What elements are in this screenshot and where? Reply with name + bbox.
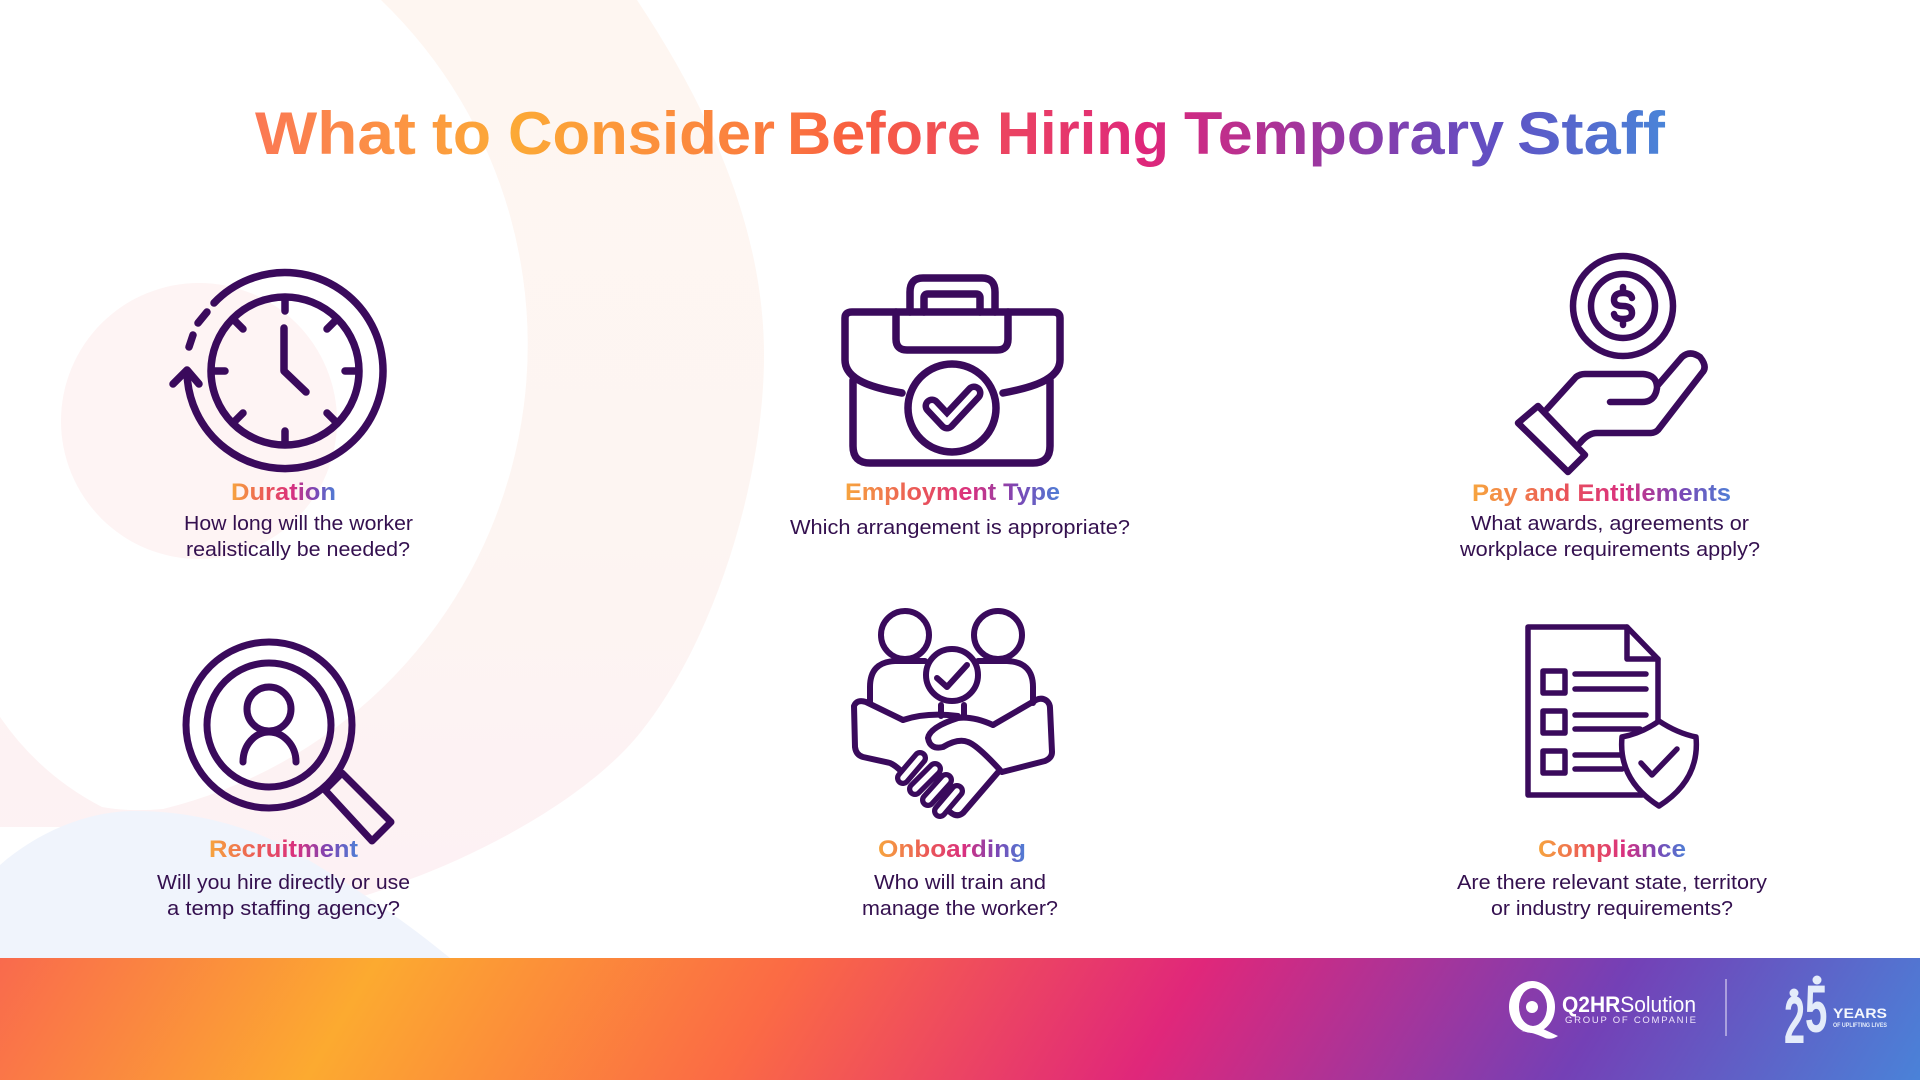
title: [255, 100, 1666, 167]
text: Duration question: How long will the worker: [184, 513, 413, 535]
title: Staff: [1517, 100, 1666, 167]
logo: 25 years: 2: [1784, 984, 1805, 1058]
block: Employment Type: [790, 479, 1130, 539]
divider: [1726, 979, 1727, 1036]
logo: 25 years: [1784, 972, 1888, 1058]
title: to: [432, 100, 491, 167]
heading: Employment Type: Employment Type: [845, 479, 1060, 506]
title: Temporary: [1184, 100, 1505, 167]
title: Hiring: [997, 100, 1169, 167]
background decorative shapes: [0, 0, 764, 958]
icon: magnifier with person: [186, 642, 391, 841]
text: Recruitment question: [157, 872, 410, 920]
logo: 25 years: 5: [1805, 972, 1827, 1047]
block: Onboarding: [862, 836, 1058, 920]
block: Compliance: [1457, 836, 1767, 920]
text: Duration question: realistically be needed?: [186, 539, 410, 561]
icon: handshake with two people: [854, 611, 1052, 815]
heading: Recruitment: Recruitment: [209, 836, 358, 863]
title: Before: [787, 100, 981, 167]
text: Recruitment question: Will you hire directly or use: [157, 872, 410, 894]
icon: briefcase with check: [845, 278, 1060, 463]
block: Duration: [184, 479, 413, 561]
logo: Q2HR Solution: GROUP OF COMPANIE: [1565, 1015, 1696, 1026]
title: What: [255, 100, 416, 167]
logo mark: Q: [1509, 981, 1558, 1039]
block: Pay and Entitlements: [1459, 480, 1760, 561]
title: Consider: [508, 100, 775, 167]
icon: hand holding coin: [1518, 256, 1705, 472]
heading: Pay and Entitlements: Pay and Entitlements: [1472, 480, 1731, 507]
text: Compliance question: Are there relevant state, territory: [1457, 872, 1767, 894]
footer band: [0, 958, 1920, 1080]
icon: checklist document with shield: [1528, 627, 1696, 806]
logo: Q2HR Solution: [1509, 981, 1696, 1039]
logo text: Q2HRSolution: [1562, 992, 1696, 1017]
heading: Onboarding: Onboarding: [878, 836, 1026, 863]
icon: clock with circular arrow: [173, 273, 383, 469]
block: Recruitment: [157, 836, 410, 920]
text: Employment Type question: Which arrangement is appropriate?: [790, 517, 1130, 539]
text: Onboarding question: [862, 872, 1058, 920]
text: Pay and Entitlements question: [1459, 513, 1760, 561]
text: Onboarding question: manage the worker?: [862, 898, 1058, 920]
heading: Compliance: Compliance: [1538, 836, 1686, 863]
text: Onboarding question: Who will train and: [874, 872, 1046, 894]
text: Pay and Entitlements question: workplace requirements apply?: [1459, 539, 1760, 561]
heading: Duration: Duration: [231, 479, 336, 506]
text: Pay and Entitlements question: What awards, agreements or: [1471, 513, 1749, 535]
logo: 25 years: YEARS: [1833, 1005, 1887, 1021]
logo: 25 years: OF UPLIFTING LIVES: [1833, 1022, 1888, 1029]
text: Recruitment question: a temp staffing agency?: [167, 898, 400, 920]
text: Compliance question: [1457, 872, 1767, 920]
text: Compliance question: or industry requirements?: [1491, 898, 1733, 920]
text: Duration question: [184, 513, 413, 561]
